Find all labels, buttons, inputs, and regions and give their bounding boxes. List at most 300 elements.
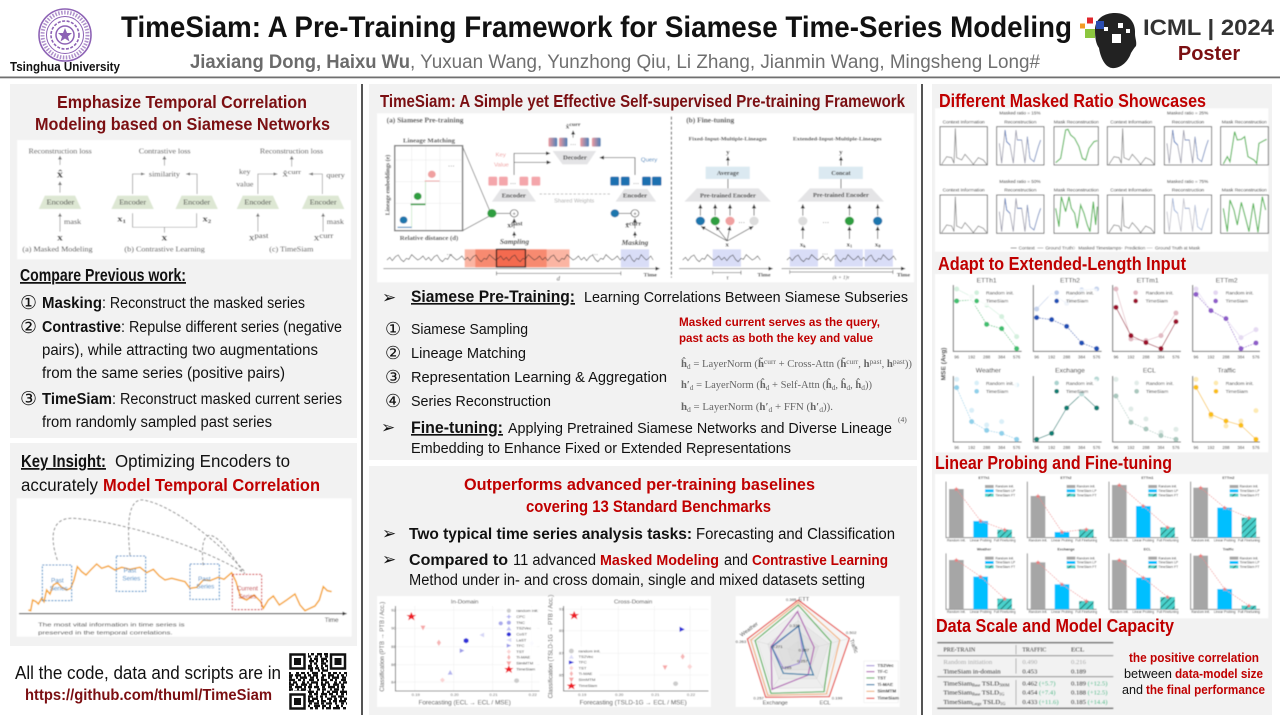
TimeSiam diagram: query (326, 171, 345, 179)
chart: Weather: Random init. (947, 610, 966, 614)
past series boxes (42, 556, 219, 601)
chart: ETTh1 (953, 278, 1022, 359)
heading: Emphasize Temporal Correlation (57, 92, 307, 112)
chart: ECL: ECL (1144, 548, 1152, 552)
comparison bullet (382, 550, 888, 589)
extended input lineages: … (822, 249, 828, 256)
sampling timeline: … (446, 250, 453, 257)
in-domain scatter: 0.20 (451, 692, 460, 697)
TimeSiam diagram: value (236, 180, 254, 188)
chart: Traffic: 96 (1194, 445, 1199, 450)
chart: Weather: Random init. (995, 556, 1014, 560)
chart: Traffic: 288 (1222, 445, 1230, 450)
fixed input lineages (679, 136, 773, 282)
chart: ECL: TimeSiam FT (1158, 565, 1178, 569)
chart: Exchange: Random init. (1029, 610, 1047, 614)
ratio 15% plots: Context Information (943, 119, 985, 125)
extended input lineages (782, 136, 911, 281)
radar labels: 0.357 (799, 647, 810, 652)
correlation callout: and (1122, 683, 1143, 697)
chart: Exchange: Exchange (1055, 368, 1085, 375)
heading: Modeling based on Siamese Networks (35, 114, 330, 134)
chart: ETTh2: 576 (1093, 354, 1101, 359)
in-domain scatter: 0.21 (489, 692, 498, 697)
cross-domain scatter: 85 (559, 672, 564, 677)
table rows: 0.189 (+12.5) (1071, 681, 1107, 688)
legend: Context (1019, 246, 1035, 251)
chart: ETTm1: Full Finetuning (1157, 538, 1179, 542)
Siamese pre-training text: ➢ (382, 288, 396, 307)
heading: masked ratio: Different Masked Ratio Showcases (939, 90, 1206, 111)
Siamese pre-training text: Learning Correlations Between Siamese Subseries (584, 290, 908, 306)
contrastive learning diagram: x (162, 233, 168, 243)
chart: ETTh2: ETTh2 (1060, 278, 1080, 285)
chart: ETTm2: Random init. (1240, 485, 1258, 489)
left encoder: + (512, 211, 516, 217)
masked ratio figure: Masked ratio = 75% (1167, 179, 1208, 184)
fine-tuning text: ➢ (381, 418, 395, 437)
equations: d (690, 384, 694, 392)
extended input lineages: (k + 1)τ (833, 274, 849, 281)
results table (937, 643, 1113, 708)
equations: past (893, 358, 905, 366)
chart: Traffic: TimeSiam FT (1240, 565, 1259, 569)
table header: ECL (1071, 647, 1085, 653)
radar labels: 0.365 (786, 597, 797, 602)
table header (943, 647, 1085, 653)
fixed input lineages: Time (757, 273, 771, 279)
ratio 25% plots (1107, 119, 1268, 165)
TimeSiam diagram: mask (327, 218, 344, 226)
extended input lineages: Extended-Input-Multiple-Lineages (793, 136, 882, 142)
legend: TS2Vec (516, 626, 531, 631)
table rows: TimeSiam in-domain (943, 668, 1001, 675)
tasks bullet (382, 524, 895, 543)
chart: Traffic: Random init. (1240, 556, 1258, 560)
code link (15, 662, 281, 704)
chart: ETTm1: Random init. (1110, 538, 1129, 542)
legend: CoST (516, 632, 528, 637)
TimeSiam diagram: key (239, 168, 251, 176)
equations: (4) (898, 415, 907, 424)
table rows: 0.453 (1022, 668, 1038, 675)
legend: Ti-MAE (516, 655, 530, 660)
chart: ETTh1: Linear Probing (970, 538, 992, 542)
equations: h (887, 359, 893, 370)
decoder: curr (569, 122, 581, 128)
ratio 75% plots (1107, 188, 1268, 233)
table header: PRE-TRAIN (943, 647, 976, 653)
steps list: Siamese Sampling (411, 321, 528, 338)
radar labels: 0.257 (753, 696, 765, 701)
legend: TS2Vec (578, 654, 593, 659)
legend: Prediction (1125, 246, 1146, 251)
steps list: Representation Learning & Aggregation (411, 369, 667, 386)
equations: ĥ (855, 378, 862, 391)
steps list: ④ (385, 391, 401, 411)
legend: TimeSiam (578, 683, 598, 688)
key insight text: accurately (21, 475, 98, 495)
chart: ECL: Linear Probing (1132, 610, 1154, 614)
masked modeling diagram (22, 147, 93, 253)
box labels: Current (237, 586, 258, 593)
cross-domain scatter: Forecasting (TSLD-1G → ECL / MSE) (580, 700, 687, 707)
chart: ECL: 288 (1142, 445, 1150, 450)
equations: ĥ (826, 378, 832, 391)
heading (464, 476, 815, 516)
ratio 75% plots: Context Information (1110, 188, 1153, 194)
legend: CPC (516, 614, 525, 619)
chart: ETTm2 (1193, 278, 1260, 359)
left encoder: Sampling (500, 238, 530, 246)
chart: Exchange: Exchange (1057, 548, 1075, 552)
left encoder: past (511, 220, 523, 227)
chart: Weather (946, 548, 1016, 614)
legend: Ground Truth at Mask (1155, 246, 1201, 251)
decoder: … (570, 140, 576, 147)
heading: data scale: Data Scale and Model Capacity (936, 615, 1175, 636)
chart: ETTm2: Linear Probing (1214, 538, 1236, 542)
TimeSiam diagram: (c) TimeSiam (269, 245, 313, 253)
chart: Weather: 384 (998, 445, 1006, 450)
chart: Weather: 192 (968, 445, 976, 450)
code link: https://github.com/thuml/TimeSiam (25, 687, 272, 704)
time series figure: Time (325, 617, 339, 624)
chart: Traffic: 192 (1207, 445, 1215, 450)
correlation callout: data-model size (1175, 667, 1263, 681)
caption: preserved in the temporal correlations. (38, 630, 173, 636)
correlation callout: the final performance (1146, 683, 1265, 697)
extended input lineages: x (847, 241, 850, 248)
query callout: Masked current serves as the query, (679, 315, 880, 329)
lineage matching plot: … (448, 162, 455, 169)
chart: ETTh1: Random init. (947, 538, 966, 542)
radar labels: 0.336 (789, 623, 801, 628)
in-domain scatter: Classification (PTB → PTB / Acc.) (379, 602, 386, 692)
fixed input lineages: Average (717, 170, 739, 177)
masked ratio figure: Masked ratio = 50% (999, 179, 1041, 184)
authors: Jiaxiang Dong, Haixu Wu (190, 52, 410, 73)
chart: ETTh2: Full Finetuning (1075, 538, 1097, 542)
university name: Tsinghua University (10, 60, 120, 74)
extended length charts: MSE (Avg) (941, 347, 948, 381)
chart: ECL: Random init. (1110, 610, 1129, 614)
chart: ETTm2: TimeSiam FT (1240, 493, 1259, 497)
scatter points (569, 611, 692, 686)
right encoder (540, 158, 661, 247)
key insight text (21, 451, 320, 495)
chart: ETTm1: TimeSiam FT (1158, 493, 1178, 497)
comparison bullet: Contrastive Learning (752, 552, 888, 569)
extended input lineages: x (875, 241, 878, 248)
chart: Traffic (1193, 368, 1260, 450)
steps list: Series Reconstruction (411, 393, 551, 410)
equations: d (847, 384, 851, 392)
chart: ECL: Random init. (1158, 556, 1177, 560)
tasks bullet: Two typical time series analysis tasks: (409, 526, 692, 543)
panel: key insight (10, 443, 357, 646)
chart: ECL (1113, 368, 1181, 450)
legend: SimMTM (578, 677, 596, 682)
chart: Exchange: Linear Probing (1051, 610, 1073, 614)
in-domain scatter: 88 (391, 644, 397, 649)
sampling timeline: … (592, 250, 598, 257)
cross-domain scatter: 89 (559, 628, 564, 633)
ratio 75% plots: Mask Reconstruction (1222, 188, 1267, 194)
table rows: TimeSiam (943, 690, 971, 697)
pre-training sub-figure (383, 117, 661, 282)
left encoder (487, 153, 551, 246)
equations: d (861, 384, 866, 392)
table rows: 1G (1000, 701, 1005, 706)
chart: Traffic: Full Finetuning (1238, 610, 1260, 614)
lineage matching plot: Relative distance (d) (400, 235, 458, 242)
cross-domain scatter: 0.21 (651, 692, 660, 697)
in-domain scatter: 0.22 (529, 692, 538, 697)
heading: covering 13 Standard Benchmarks (526, 498, 771, 516)
radar legend: TST (877, 675, 886, 680)
box labels: Series (238, 593, 256, 600)
equations: h′ (681, 380, 690, 391)
radar legend: TS2Vec (877, 663, 894, 668)
contrastive learning diagram: x (117, 214, 122, 224)
scatter plots (377, 595, 711, 707)
tasks bullet: Forecasting and Classification (696, 526, 895, 543)
correlation callout (1122, 651, 1265, 697)
radar labels: 0.271 (772, 644, 783, 649)
box labels: Series (122, 575, 140, 582)
legend: TFC (516, 643, 525, 648)
fixed input lineages: Fixed-Input-Multiple-Lineages (689, 136, 767, 142)
chart: Weather: Weather (977, 548, 992, 552)
list of previous work: TimeSiam (42, 391, 112, 408)
ratio 15% plots: Mask Reconstruction (1054, 119, 1099, 125)
Siamese pre-training text: Siamese Pre-Training: (411, 288, 575, 306)
equations: past (870, 358, 882, 366)
fixed input lineages: y (726, 149, 730, 156)
ratio 15% plots: Reconstruction (1004, 119, 1037, 125)
TimeSiam diagram: curr (319, 232, 334, 240)
table rows: Base (972, 692, 980, 697)
ratio 50% plots (940, 188, 1099, 233)
chart: Exchange: 384 (1078, 445, 1086, 450)
right encoder: + (633, 211, 637, 217)
equations: d (819, 406, 824, 414)
equations: , (858, 359, 864, 370)
chart: ETTh2: TimeSiam FT (1077, 493, 1097, 497)
radar chart (736, 596, 900, 707)
masked ratio figure: Masked ratio = 15% (999, 110, 1041, 115)
chart: Exchange: Random init. (1077, 556, 1095, 560)
chart: ETTh1: 192 (968, 354, 976, 359)
masked ratio figure (935, 108, 1268, 252)
comparison figure (17, 140, 351, 259)
equations: h (681, 402, 688, 413)
chart: Traffic: Traffic (1223, 548, 1234, 552)
chart: ECL: ECL (1143, 368, 1156, 375)
Tsinghua logo (39, 9, 91, 61)
extended input lineages: Concat (831, 170, 852, 177)
contrastive learning diagram: (b) Contrastive Learning (124, 245, 205, 253)
chart: ECL: 96 (1114, 445, 1119, 450)
cross-domain scatter: 0.20 (615, 692, 624, 697)
chart: ETTm1: ETTm1 (1141, 476, 1153, 480)
chart: ETTh1: TimeSiam (986, 299, 1008, 305)
contrastive learning diagram: 1 (122, 219, 126, 225)
equations: curr (764, 358, 777, 366)
table rows: Random initiation (943, 659, 993, 666)
right encoder: Query (641, 158, 657, 164)
TimeSiam diagram: curr (288, 168, 301, 176)
left encoder: Encoder (502, 193, 526, 200)
extended input lineages: k (803, 244, 806, 249)
box labels (50, 568, 258, 600)
chart: ETTm2: 384 (1237, 354, 1245, 359)
cross-domain scatter: 87 (559, 651, 564, 656)
legend: Masked Timestamps (1078, 246, 1122, 251)
subheading: compare previous work: Compare Previous work: (20, 265, 186, 285)
left encoder: Value (494, 162, 509, 168)
list of previous work: : Repulse different series (negative (121, 319, 342, 336)
radar labels: 0.199 (832, 696, 843, 701)
in-domain scatter: 86 (391, 662, 397, 667)
legend: TimeSiam (516, 666, 536, 671)
left encoder: x (507, 221, 511, 230)
sampling timeline: d (557, 275, 561, 282)
radar legend: Ti-MAE (877, 682, 893, 687)
linear probing bar charts (935, 474, 1268, 618)
fine-tuning text (381, 418, 892, 457)
chart: ETTm1: TimeSiam (1146, 299, 1168, 305)
table rows: TSLD (981, 699, 1000, 706)
contrastive learning diagram: Encoder (183, 198, 211, 206)
decoder (548, 122, 601, 164)
decoder: Decoder (563, 155, 587, 162)
chart: ETTh1: Random init. (986, 291, 1014, 297)
TimeSiam diagram (236, 147, 345, 253)
table rows: TSLD (980, 690, 999, 697)
header (0, 9, 1280, 78)
chart: Exchange: TimeSiam FT (1077, 565, 1097, 569)
chart: Traffic: TimeSiam (1226, 389, 1248, 395)
contrastive learning diagram: similarity (149, 170, 180, 178)
cross-domain scatter: Cross-Domain (614, 600, 652, 606)
chart: Traffic: TimeSiam LP (1240, 561, 1260, 565)
table rows: 0.189 (1071, 668, 1087, 675)
chart: ETTh2 (1027, 476, 1097, 542)
chart: ECL: 384 (1157, 445, 1165, 450)
ratio 50% plots: Reconstruction (1004, 188, 1037, 194)
comparison bullet: and (724, 552, 748, 569)
masked ratio figure: Masked ratio = 25% (1167, 110, 1208, 115)
chart: ETTh2: 192 (1048, 354, 1056, 359)
chart: ETTh1: TimeSiam LP (995, 489, 1016, 493)
poster label: Poster (1178, 43, 1240, 65)
chart: ETTm2: TimeSiam (1226, 299, 1248, 305)
correlation callout: the positive correlation (1129, 651, 1259, 665)
comparison bullet: Compared to (409, 552, 508, 569)
list of previous work: from the same series (positive pairs) (42, 365, 285, 382)
in-domain scatter: 0.19 (412, 692, 421, 697)
query callout (679, 315, 880, 345)
query callout: past acts as both the key and value (679, 331, 873, 345)
chart: ETTh1: Full Finetuning (994, 538, 1016, 542)
chart: Weather: TimeSiam (986, 389, 1008, 395)
radar labels: 0.502 (846, 630, 857, 635)
right encoder: Encoder (623, 193, 647, 200)
chart: ETTm2: Random init. (1191, 538, 1210, 542)
equations: )). (823, 402, 833, 413)
equations: + FFN ( (772, 402, 811, 413)
radar labels: Exchange (763, 701, 788, 707)
key insight text: Key Insight: (21, 451, 106, 471)
legend (504, 607, 538, 673)
chart: ETTm1: ETTm1 (1137, 278, 1159, 285)
chart: ETTh1: ETTh1 (977, 278, 997, 285)
correlation callout: between (1124, 667, 1172, 681)
chart: ETTm1: Random init. (1146, 291, 1174, 297)
chart: ETTh2: ETTh2 (1060, 476, 1072, 480)
fixed input lineages: x (725, 241, 730, 248)
chart: ETTh2: Random init. (1029, 538, 1047, 542)
left encoder: Key (496, 153, 506, 159)
chart: ETTh1: 576 (1013, 354, 1021, 359)
chart: Traffic (1191, 548, 1260, 614)
Siamese pre-training text (382, 288, 908, 307)
chart: Weather: TimeSiam LP (995, 561, 1016, 565)
ratio 50% plots: Mask Reconstruction (1054, 188, 1099, 194)
legend: TNC (516, 620, 525, 625)
table rows: 500M (999, 683, 1010, 688)
equations: curr (846, 358, 859, 366)
legend: TFC (578, 660, 587, 665)
lineage matching plot (384, 137, 490, 242)
masked modeling diagram: mask (64, 218, 81, 226)
in-domain scatter: 92 (391, 607, 397, 612)
masked modeling diagram: x̂ (57, 169, 63, 180)
chart: Traffic: 384 (1237, 445, 1245, 450)
box labels: Series (196, 584, 214, 591)
chart: Traffic: Random init. (1191, 610, 1210, 614)
chart: Exchange: TimeSiam LP (1077, 561, 1097, 565)
radar legend: TF-C (877, 669, 889, 674)
table header: TRAFFIC (1022, 647, 1046, 653)
equations: = LayerNorm ( (691, 359, 759, 370)
chart: ETTm1: 96 (1114, 354, 1119, 359)
chart: ECL: Random init. (1146, 381, 1174, 387)
ratio 15% plots (940, 119, 1099, 165)
list of previous work: ② (20, 317, 37, 338)
chart: Exchange: Full Finetuning (1075, 610, 1097, 614)
chart: ETTm1 (1113, 278, 1181, 359)
panel: results column (932, 84, 1272, 715)
chart: ETTh2 (1033, 278, 1102, 359)
chart: Traffic: Random init. (1226, 381, 1254, 387)
chart: ETTm2: Random init. (1226, 291, 1254, 297)
in-domain scatter (379, 600, 540, 707)
table rows: TimeSiam (943, 681, 971, 688)
list of previous work: ③ (20, 389, 37, 410)
fine-tuning sub-figure: (b) Fine-tuning (686, 117, 735, 124)
chart: Exchange: 288 (1063, 445, 1071, 450)
equations: h′ (759, 402, 769, 413)
right encoder: … (633, 179, 639, 186)
chart: ETTm2: ETTm2 (1216, 278, 1238, 285)
radar labels: Traffic (848, 639, 859, 654)
equations: )) (905, 359, 912, 370)
list of previous work: pairs), while attracting two augmentations (42, 342, 318, 359)
chart: ETTm2: 288 (1222, 354, 1230, 359)
